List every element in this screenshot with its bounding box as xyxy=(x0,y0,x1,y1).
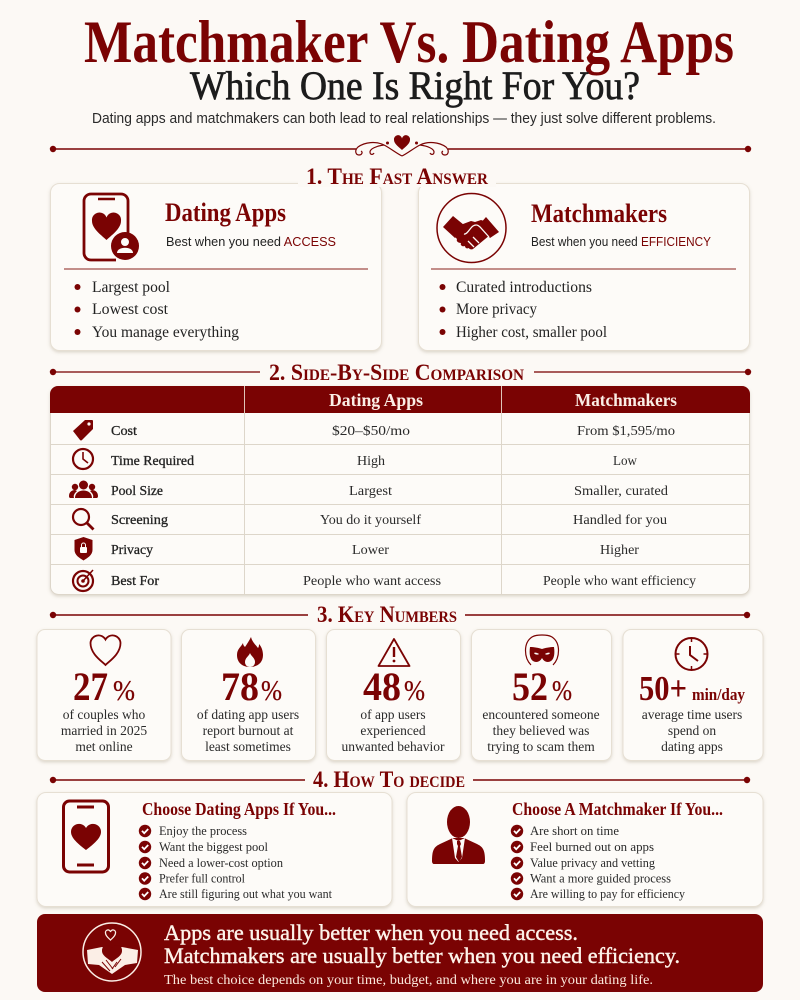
heading: section 2: 2. Side-By-Side Comparison xyxy=(269,360,524,385)
stat card: 78% xyxy=(182,630,316,760)
panel heading: Choose Dating Apps If You... xyxy=(142,799,336,819)
stat card: 27% xyxy=(37,630,171,760)
figure xyxy=(363,664,425,709)
table header labels: Dating Apps xyxy=(329,390,423,410)
checklist: Need a lower-cost option xyxy=(159,855,283,870)
checklist: Are willing to pay for efficiency xyxy=(530,886,685,901)
heading: section 4 xyxy=(50,767,750,792)
card subheading: Best when you need EFFICIENCY xyxy=(531,235,712,249)
figure: 48 xyxy=(363,664,401,709)
description: of dating app users xyxy=(197,707,299,722)
figure: 50+ xyxy=(639,669,687,708)
table header labels xyxy=(329,390,677,410)
checklist: Feel burned out on apps xyxy=(530,839,654,854)
description xyxy=(197,707,299,754)
description xyxy=(341,707,445,754)
panel heading: Choose A Matchmaker If You... xyxy=(512,799,723,819)
row: cost: $20–$50/mo xyxy=(332,424,410,439)
row: privacy: Privacy xyxy=(111,543,153,558)
row: screening: Screening xyxy=(111,513,168,528)
figure xyxy=(73,664,135,709)
description: average time users xyxy=(642,707,742,722)
icon: magnifier xyxy=(73,509,94,530)
icon: flame xyxy=(237,637,263,667)
row: best for: Best For xyxy=(111,574,159,589)
bullet list: Higher cost, smaller pool xyxy=(456,324,607,341)
description: unwanted behavior xyxy=(341,739,445,754)
figure: % xyxy=(552,676,572,707)
row: privacy: Higher xyxy=(600,543,639,558)
checklist: Are short on time xyxy=(530,823,619,838)
figure: % xyxy=(261,676,282,707)
tagline: Dating apps and matchmakers can both lead to real relationships — they just solve different problems. xyxy=(92,111,716,127)
figure: 27 xyxy=(73,664,108,709)
card heading: Matchmakers xyxy=(531,199,667,228)
description: least sometimes xyxy=(205,739,291,754)
bullet list: More privacy xyxy=(456,301,537,318)
icon: hearts and joined hands xyxy=(83,923,141,981)
row: pool size: Pool Size xyxy=(111,484,163,499)
row: best for: People who want efficiency xyxy=(543,574,696,589)
checklist: Want the biggest pool xyxy=(159,839,268,854)
bullet list: Largest pool xyxy=(92,279,170,296)
row: privacy: Lower xyxy=(352,543,389,558)
checklist: Enjoy the process xyxy=(159,823,247,838)
description: encountered someone xyxy=(482,707,600,722)
row: best for xyxy=(111,574,696,589)
checklist: Want a more guided process xyxy=(530,870,671,886)
description xyxy=(482,707,600,754)
bottom banner xyxy=(37,914,763,992)
row: time required: Time Required xyxy=(111,454,194,469)
description: of app users xyxy=(360,707,426,722)
description: of couples who xyxy=(63,707,145,722)
description: spend on xyxy=(668,723,716,738)
icon: person in suit xyxy=(432,806,485,864)
row: pool size: Smaller, curated xyxy=(574,484,668,499)
figure: % xyxy=(404,676,425,707)
figure xyxy=(221,664,282,709)
figure xyxy=(639,669,745,708)
panel: matchmakers quick answer xyxy=(418,184,750,350)
row: cost: From $1,595/mo xyxy=(577,424,675,439)
heading: section 1: 1. The Fast Answer xyxy=(306,164,488,189)
checklist xyxy=(139,823,332,901)
icon: phone with heart and person xyxy=(84,194,139,260)
description xyxy=(61,707,147,754)
icon: clock xyxy=(676,638,708,670)
icon: heart outline xyxy=(90,635,120,665)
description: they believed was xyxy=(493,723,589,738)
checklist: Value privacy and vetting xyxy=(530,855,655,870)
checklist xyxy=(511,823,685,901)
checklist: Prefer full control xyxy=(159,870,245,886)
icon: handshake in circle xyxy=(437,194,506,262)
row: time required xyxy=(111,454,638,469)
icon: clock xyxy=(73,449,93,469)
description: report burnout at xyxy=(203,723,294,738)
description: trying to scam them xyxy=(487,739,595,754)
bullet list xyxy=(440,279,607,341)
icon: price tag xyxy=(73,420,93,440)
description: dating apps xyxy=(661,739,723,754)
panel: choose a matchmaker xyxy=(407,792,763,906)
figure: % xyxy=(113,676,135,707)
figure: 78 xyxy=(221,664,259,709)
comparison table xyxy=(50,386,750,595)
icon: group of people xyxy=(69,480,98,498)
row: screening: You do it yourself xyxy=(320,513,421,528)
icon: privacy shield xyxy=(74,537,92,560)
bullet list: Curated introductions xyxy=(456,279,592,296)
heading: section 2 xyxy=(50,360,751,385)
figure xyxy=(512,664,572,709)
stat card: 48% xyxy=(326,630,460,760)
row: pool size xyxy=(111,484,668,499)
card heading: Dating Apps xyxy=(165,198,286,227)
description: experienced xyxy=(360,723,426,738)
table header labels: Matchmakers xyxy=(575,390,677,410)
icon: target xyxy=(73,570,93,591)
figure: min/day xyxy=(692,685,745,704)
panel: dating apps quick answer xyxy=(50,184,382,350)
description: married in 2025 xyxy=(61,723,147,738)
card subheading: Best when you need ACCESS xyxy=(166,235,336,249)
icon: phone with heart xyxy=(64,801,108,872)
stat card: 52% xyxy=(472,630,612,760)
checklist: Are still figuring out what you want xyxy=(159,886,332,901)
bullet list: Lowest cost xyxy=(92,301,169,318)
heading: section 3: 3. Key Numbers xyxy=(317,602,457,627)
bullet list xyxy=(74,279,239,341)
heading: section 4: 4. How To decide xyxy=(313,767,465,792)
description: met online xyxy=(75,739,133,754)
heading: section 3 xyxy=(50,602,750,627)
row: cost: Cost xyxy=(111,424,137,439)
icon: mask xyxy=(526,635,558,665)
row: screening xyxy=(111,513,667,528)
description xyxy=(642,707,742,754)
bullet list: You manage everything xyxy=(92,324,239,341)
banner note: The best choice depends on your time, budget, and where you are in your dating life. xyxy=(164,973,653,988)
row: privacy xyxy=(111,543,639,558)
subtitle: Which One Is Right For You? xyxy=(190,63,640,108)
panel: choose dating apps xyxy=(37,792,392,906)
row: screening: Handled for you xyxy=(573,513,667,528)
row: time required: High xyxy=(357,454,385,469)
banner statement line 1: Apps are usually better when you need access. xyxy=(164,920,578,945)
banner statement line 2: Matchmakers are usually better when you need efficiency. xyxy=(164,943,680,968)
row: pool size: Largest xyxy=(349,484,392,499)
row: time required: Low xyxy=(613,454,638,469)
icon: warning triangle xyxy=(378,639,410,666)
row: best for: People who want access xyxy=(303,574,441,589)
row: cost xyxy=(111,424,675,439)
figure: 52 xyxy=(512,664,548,709)
ornamental heart divider xyxy=(50,135,751,156)
stat card: 50+ min/day xyxy=(623,630,763,760)
